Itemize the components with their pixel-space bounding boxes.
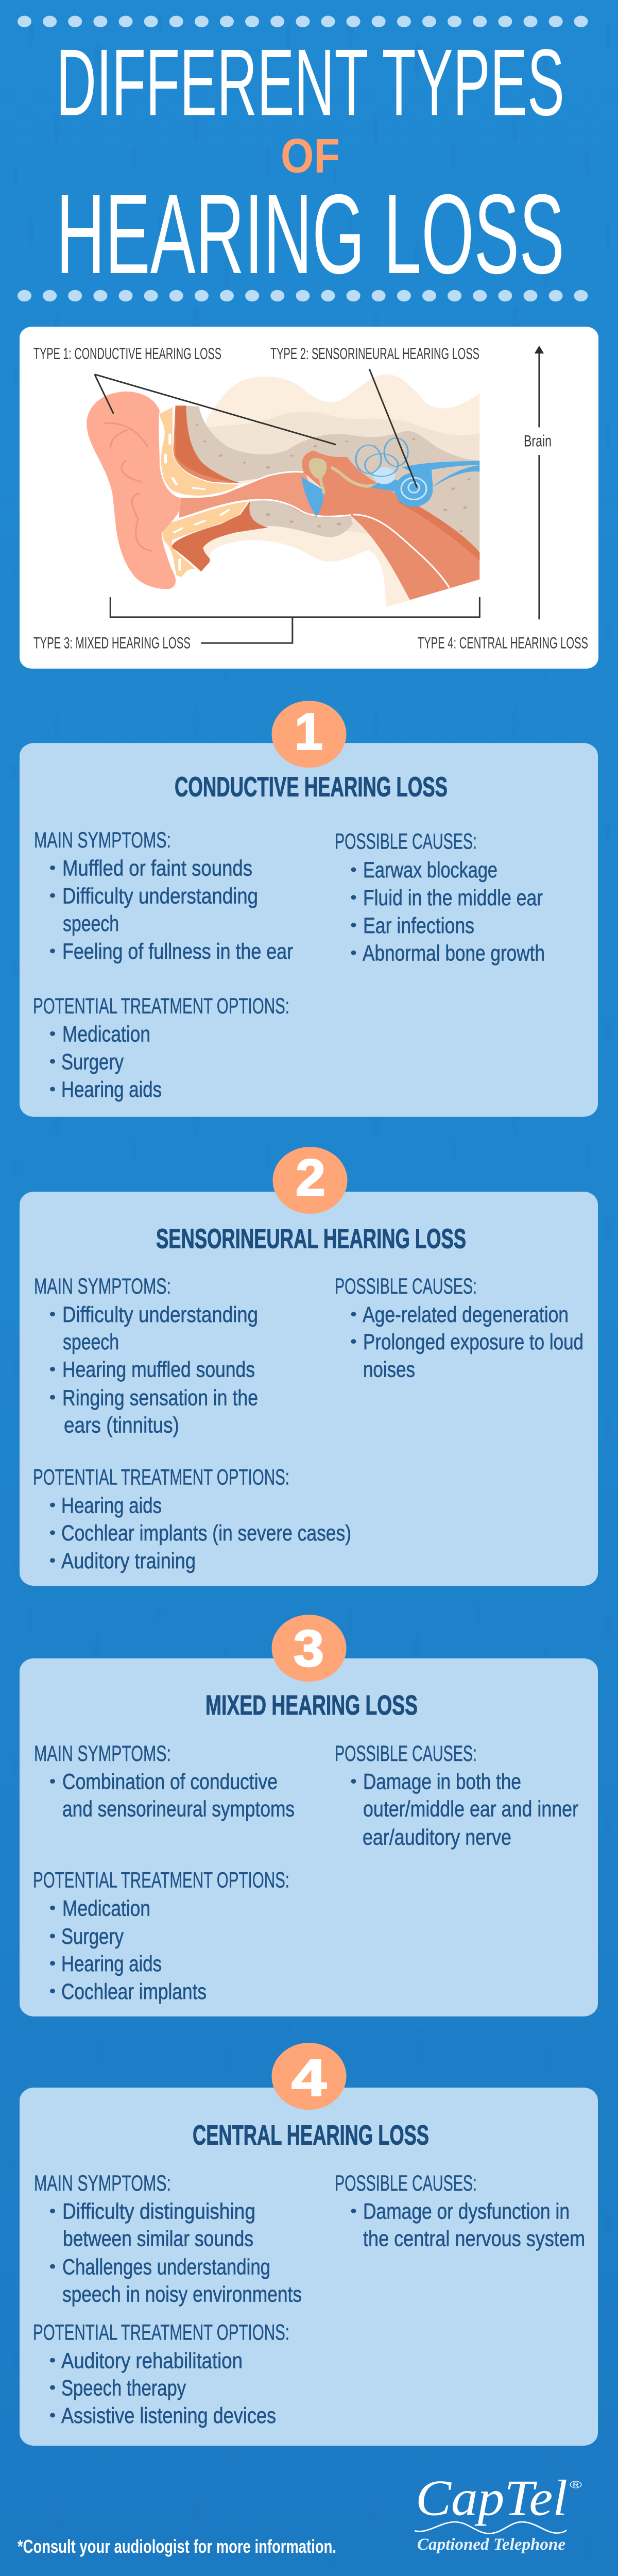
heading: CONDUCTIVE HEARING LOSS — [175, 771, 448, 803]
possible causes — [335, 1274, 583, 1382]
outer ear tissue, upper — [159, 405, 243, 497]
heading: MIXED HEARING LOSS — [205, 1690, 418, 1721]
possible causes: Ear infections — [363, 913, 474, 938]
main symptoms: MAIN SYMPTOMS: — [34, 1274, 171, 1299]
treatment options: Cochlear implants (in severe cases) — [61, 1520, 351, 1546]
main symptoms: between similar sounds — [63, 2226, 253, 2251]
treatment options: POTENTIAL TREATMENT OPTIONS: — [33, 993, 289, 1018]
pinna — [87, 392, 181, 589]
treatment options: Cochlear implants — [61, 1979, 207, 2004]
main symptoms: speech — [63, 911, 119, 936]
treatment options: Medication — [62, 1022, 150, 1046]
treatment options: Hearing aids — [61, 1951, 162, 1976]
main symptoms: Feeling of fullness in the ear — [62, 939, 293, 963]
footnote: *Consult your audiologist for more information. — [18, 2537, 336, 2557]
number badge 4: 4 — [291, 2049, 327, 2107]
middle ear flesh — [302, 450, 479, 600]
number badge 3 — [272, 1615, 346, 1682]
possible causes: POSSIBLE CAUSES: — [335, 1741, 477, 1766]
diagram labels: TYPE 3: MIXED HEARING LOSS — [33, 634, 191, 652]
logo: CapTel: CapTel — [416, 2470, 568, 2526]
possible causes: POSSIBLE CAUSES: — [335, 829, 477, 854]
main symptoms — [34, 1274, 258, 1437]
number badge 3: 3 — [294, 1619, 324, 1677]
main symptoms: speech in noisy environments — [62, 2282, 302, 2307]
treatment options: POTENTIAL TREATMENT OPTIONS: — [33, 1465, 289, 1489]
panel: central hearing loss — [20, 2043, 598, 2446]
panel: mixed hearing loss — [20, 1615, 598, 2016]
panel: sensorineural hearing loss — [20, 1147, 598, 1586]
main symptoms — [34, 1741, 295, 1821]
illustration: ear anatomy — [87, 346, 544, 643]
panel: conductive hearing loss — [20, 701, 598, 1117]
possible causes: Earwax blockage — [363, 857, 497, 883]
logo: CapTel: ® — [570, 2480, 582, 2490]
main symptoms: and sensorineural symptoms — [62, 1797, 295, 1821]
title: OF — [281, 129, 340, 182]
main symptoms: Challenges understanding — [62, 2255, 270, 2279]
ear canal — [179, 472, 319, 518]
possible causes — [335, 2171, 585, 2251]
treatment options: Surgery — [61, 1049, 124, 1074]
treatment options — [33, 2320, 289, 2428]
treatment options — [33, 1465, 351, 1573]
inner ear — [356, 438, 479, 507]
possible causes: noises — [363, 1357, 415, 1382]
diagram labels — [33, 345, 588, 652]
main symptoms: MAIN SYMPTOMS: — [34, 2171, 171, 2195]
treatment options — [33, 1868, 289, 2004]
main symptoms: MAIN SYMPTOMS: — [34, 827, 171, 852]
heading: CENTRAL HEARING LOSS — [193, 2120, 429, 2151]
logo: CapTel — [415, 2470, 582, 2553]
eardrum — [301, 477, 324, 516]
main symptoms: Muffled or faint sounds — [62, 856, 252, 880]
main symptoms: MAIN SYMPTOMS: — [34, 1741, 171, 1766]
title — [56, 30, 564, 297]
panel: ear diagram — [20, 327, 598, 669]
treatment options: Medication — [62, 1896, 150, 1921]
top dotted divider — [18, 15, 588, 27]
main symptoms: Hearing muffled sounds — [62, 1357, 255, 1382]
number badge 1: 1 — [295, 703, 323, 760]
possible causes: POSSIBLE CAUSES: — [335, 1274, 477, 1299]
diagram labels: Brain — [524, 432, 552, 450]
main symptoms: Difficulty understanding — [62, 1302, 258, 1327]
possible causes: ear/auditory nerve — [363, 1825, 511, 1850]
treatment options: Hearing aids — [61, 1493, 162, 1518]
possible causes: POSSIBLE CAUSES: — [335, 2171, 477, 2195]
main symptoms: ears (tinnitus) — [64, 1413, 179, 1437]
number badge 4 — [272, 2043, 346, 2110]
number badge 2: 2 — [296, 1149, 325, 1207]
treatment options: POTENTIAL TREATMENT OPTIONS: — [33, 2320, 289, 2345]
ossicles — [309, 458, 327, 479]
possible causes — [335, 1741, 578, 1850]
possible causes: Damage in both the — [363, 1769, 521, 1794]
diagram labels: TYPE 1: CONDUCTIVE HEARING LOSS — [33, 345, 221, 363]
treatment options: Assistive listening devices — [61, 2403, 276, 2428]
possible causes — [335, 829, 545, 965]
possible causes: Abnormal bone growth — [363, 941, 545, 965]
possible causes: Fluid in the middle ear — [363, 885, 543, 910]
leader lines — [95, 369, 417, 487]
outer ear tissue, lower — [162, 500, 250, 578]
bottom dotted divider — [18, 290, 588, 301]
main symptoms — [34, 2171, 302, 2307]
number badge 1 — [272, 701, 346, 768]
main symptoms — [34, 827, 293, 963]
treatment options: Speech therapy — [61, 2376, 186, 2400]
main symptoms: Combination of conductive — [62, 1769, 278, 1794]
logo: CapTel: Captioned Telephone — [417, 2535, 565, 2553]
bracket — [110, 597, 479, 643]
main symptoms: Ringing sensation in the — [62, 1385, 258, 1410]
main symptoms: speech — [63, 1329, 119, 1354]
main symptoms: Difficulty distinguishing — [62, 2199, 255, 2224]
main symptoms: Difficulty understanding — [62, 884, 258, 908]
treatment options: Hearing aids — [61, 1077, 162, 1102]
arrow to brain — [535, 346, 544, 619]
treatment options: Auditory training — [61, 1548, 196, 1573]
treatment options: Auditory rehabilitation — [61, 2348, 243, 2373]
treatment options: POTENTIAL TREATMENT OPTIONS: — [33, 1868, 289, 1892]
treatment options — [33, 993, 289, 1102]
number badge 2 — [273, 1147, 347, 1214]
treatment options: Surgery — [61, 1924, 124, 1949]
